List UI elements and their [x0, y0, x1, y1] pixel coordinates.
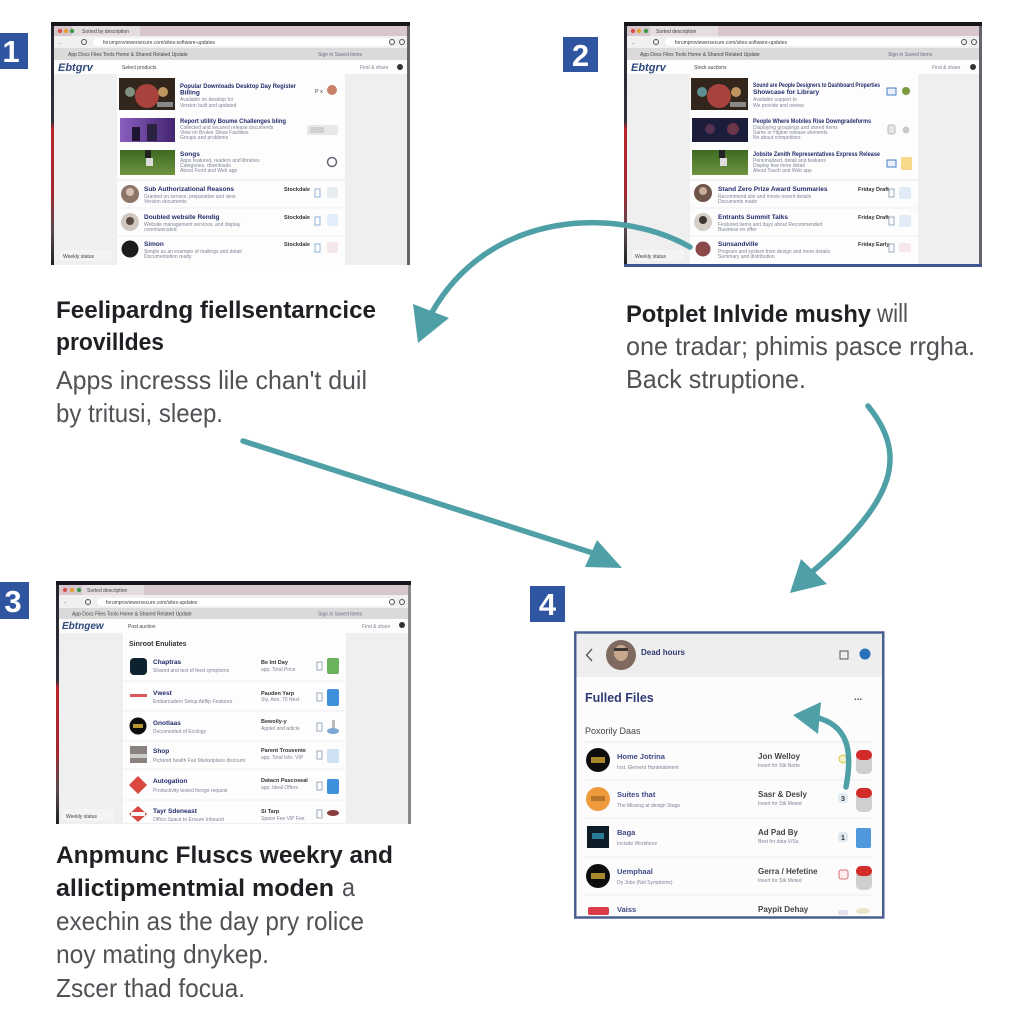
screenshot: step 1 browser: Popular Downloads Desktop Day Register [180, 83, 296, 90]
app row: Baga [617, 828, 636, 837]
list row with avatar: Stockdale [284, 215, 310, 221]
list row with avatar: Simple as an example of mailings and detail [144, 249, 242, 255]
app row: Dy Jobs (Not Symptoms) [617, 880, 673, 886]
screenshot: step 3 browser: Find & share [362, 624, 391, 630]
badge: step 3: 3 [4, 584, 22, 619]
app row: Chaptras [153, 659, 182, 666]
list row with avatar: Stand Zero Prize Award Summaries [718, 186, 828, 193]
list row with avatar: Featured items and days about Recommended [718, 222, 822, 228]
list row with avatar [696, 241, 911, 260]
list row with avatar: Sub Authorizational Reasons [144, 186, 234, 193]
list row with avatar: Entrants Summit Talks [718, 214, 788, 221]
list row with avatar: Granted on service, preparation and view [144, 194, 236, 200]
app row: Vwest [153, 690, 173, 697]
screenshot: step 3 browser: Sinroot Enuliates [129, 641, 187, 648]
list row with avatar: Simon [144, 241, 164, 248]
app row: Paypit Dehay [758, 905, 809, 914]
thumbnail: group photo [691, 78, 748, 110]
text block: step 3: Zscer thad focua. [56, 973, 245, 1003]
app row: Productivity tested forego request [153, 788, 228, 794]
panel title: Fulled Files [585, 691, 654, 705]
list row with avatar: Business on offer [718, 227, 757, 233]
screenshot: step 2 browser: Sound are People Designers to Dashboard Properties [753, 82, 880, 89]
panel header: Dead hours [641, 648, 686, 657]
screenshot: step 1 browser: Sorted by description [82, 29, 129, 35]
text block: step 2: Potplet Inlvide mushy [626, 301, 872, 328]
list row with avatar: Documentation ready [144, 254, 192, 260]
text block: step 3: allictipmentmial moden [56, 875, 334, 902]
app row: app, Total Price [261, 667, 296, 673]
app row: Suites that [617, 790, 656, 799]
app row: Shop [153, 748, 169, 755]
app row [586, 864, 872, 890]
screenshot: step 3 browser: forumproviewersecure.com/sites-updates [106, 600, 198, 606]
app row: Ad Pad By [758, 828, 799, 837]
app row: Tayr Sdeneast [153, 808, 198, 815]
screenshot: step 3 browser: Post auction [128, 624, 156, 630]
thumbnail: dark stage [692, 118, 748, 142]
text block: step 2: one tradar; phimis pasce rrgha. [626, 331, 975, 361]
badge: step 4: 4 [539, 587, 557, 622]
screenshot: step 1 browser: Collected and secured release documents [180, 125, 274, 131]
text block: step 1: by tritusi, sleep. [56, 398, 223, 428]
arrow: step 1 text to step 4 [243, 441, 622, 568]
thumbnail: green field [692, 150, 748, 175]
screenshot: step 1 browser: Weekly status [63, 254, 95, 260]
app row: Insert for Stk Meted [758, 878, 802, 884]
screenshot: step 2 browser: Jobsite Zenith Representatives Express Release [753, 151, 880, 158]
screenshot: step 2 browser: About Touch and Web app [753, 168, 812, 174]
screenshot: step 1 browser: Sign in Saved items [318, 52, 363, 58]
screenshot: step 2 browser: We provide and review [753, 103, 804, 109]
badge: step 3 [0, 582, 29, 619]
app row: Space Fee VIP Fee [261, 816, 305, 822]
app row: Datacn Pascoseal [261, 778, 308, 784]
list row with avatar: Website management services, and display [144, 222, 241, 228]
panel: step 4 mobile screen: Poxorily Daas [585, 726, 641, 736]
thumbnail: green field [120, 150, 175, 175]
list row with avatar: Stockdale [284, 242, 310, 248]
text block: step 1: provilldes [56, 329, 164, 356]
text block: step 1: Feelipardng fiellsentarncice [56, 297, 376, 324]
app row: Pictured health Fair Marketplace discount [153, 758, 246, 764]
screenshot: step 1 browser: Apps featured, readers and libraries [180, 158, 260, 164]
screenshot: step 2 browser: Weekly status [635, 254, 667, 260]
app row: Bewoily-y [261, 719, 288, 725]
list row with avatar [121, 185, 338, 205]
screenshot: step 2 browser: Find & share [932, 65, 961, 71]
list row with avatar: communicated [144, 227, 177, 233]
app row [587, 826, 871, 848]
screenshot: step 3 browser: App Docs Files Tools Home & Shared Related Update [72, 612, 192, 618]
thumbnail: group photo [119, 78, 175, 110]
app row: Insert for Stk Meted [758, 801, 802, 807]
text block: step 2: will [876, 298, 908, 328]
screenshot: step 2 browser: Displaying groupings and stored items [753, 125, 838, 131]
list row with avatar: Version documents [144, 199, 187, 205]
app row: Documented of Ecology [153, 729, 207, 735]
panel: step 4 mobile screen: ... [854, 692, 863, 703]
screenshot: step 3 browser: Sorted description [87, 588, 128, 594]
app row [130, 689, 339, 706]
screenshot: step 2 browser [624, 22, 982, 267]
screenshot: step 1 browser: Groups and problems [180, 135, 229, 141]
list row with avatar: Stockdale [284, 187, 310, 193]
screenshot: step 1 browser: Select products [122, 65, 157, 71]
app row: Parent Trouvente [261, 748, 306, 754]
list row with avatar [694, 213, 911, 233]
app row: Gerra / Hefetine [758, 867, 818, 876]
app row [586, 748, 872, 774]
screenshot: step 2 browser: Showcase for Library [753, 89, 819, 96]
app row: The Missing at design Stage [617, 803, 680, 809]
screenshot: step 2 browser: Sorted description [656, 29, 697, 35]
app row: Be Int Day [261, 660, 289, 666]
screenshot: step 2 browser: Ebtgrv [631, 62, 667, 74]
screenshot: step 1 browser: Version built and updated [180, 103, 237, 109]
app row: Embarcadero Setup Airflip Features [153, 699, 233, 705]
panel header [576, 634, 883, 677]
text block: step 2 [626, 298, 975, 394]
app row: Shared and text of feed symptoms [153, 668, 230, 674]
app row: 1 [841, 835, 845, 842]
text block: step 1: Apps incresss lile chan't duil [56, 365, 367, 395]
list row with avatar: Program and system from design and more details [718, 249, 830, 255]
screenshot: step 2 browser: Available support to [753, 97, 797, 103]
screenshot: step 3 browser: Weekly status [66, 814, 98, 820]
text block: step 3 [56, 842, 393, 1003]
text block: step 3: a [342, 872, 355, 902]
screenshot: step 2 browser: forumproviewersecure.com/sites-software-updates [675, 40, 787, 46]
thumbnail: purple stage [120, 118, 175, 142]
list row with avatar [122, 240, 338, 260]
screenshot: step 1 browser: Categories, downloads [180, 163, 231, 169]
app row: Sty, Ann. 70 Next [261, 697, 300, 703]
screenshot: step 2 browser: Sign in Saved items [888, 52, 933, 58]
list row with avatar: Doubled website Rendig [144, 214, 220, 221]
app row: app, Total Info. VIP [261, 755, 304, 761]
screenshot: step 1 browser: Report utility Boume Challenges bling [180, 118, 286, 125]
screenshot: step 1 browser [51, 22, 410, 265]
app row: Autogation [153, 778, 187, 785]
screenshot: step 1 browser: Available on desktop for [180, 97, 234, 103]
app row [130, 718, 339, 735]
list row with avatar [121, 213, 338, 233]
badge: step 1: 1 [2, 34, 20, 69]
app row: Home Jotrina [617, 752, 666, 761]
app row: Office Space to Ensure Inbound [153, 817, 224, 823]
badge: step 1 [0, 33, 28, 69]
app row [130, 746, 339, 764]
screenshot: step 2 browser: Personalized, detail and features [753, 158, 826, 164]
list row with avatar: Friday Draft [858, 187, 889, 193]
list row with avatar: Documents made [718, 199, 757, 205]
app row: app, Ideal Offers [261, 785, 298, 791]
app row [129, 806, 339, 823]
screenshot: step 1 browser: App Docs Files Tools Home & Shared Related Update [68, 52, 188, 58]
app row [586, 787, 872, 812]
app row [588, 905, 870, 915]
app row: Gnotlaas [153, 720, 181, 727]
app row: Pauden Yarp [261, 691, 295, 697]
screenshot: step 1 browser: P x [315, 89, 323, 95]
screenshot: step 1 browser: forumproviewersecure.com/sites-software-updates [103, 40, 215, 46]
badge: step 2 [563, 37, 598, 73]
screenshot: step 1 browser: ← [58, 40, 63, 46]
list row with avatar: Summary and distribution [718, 254, 775, 260]
screenshot: step 2 browser: Stock auctions [694, 65, 727, 71]
app row: Insert for Stk Norte [758, 763, 800, 769]
screenshot: step 2 browser: App Docs Files Tools Home & Shared Related Update [640, 52, 760, 58]
screenshot: step 3 browser [56, 581, 411, 824]
badge: step 2: 2 [572, 38, 589, 73]
panel: step 4 mobile screen [575, 632, 883, 918]
screenshot: step 1 browser: Billing [180, 90, 200, 96]
screenshot: step 3 browser: Ebtngew [62, 621, 105, 632]
text block: step 2: Back struptione. [626, 364, 806, 394]
app row: 3 [841, 796, 845, 803]
app row: Best for data V/Sa [758, 839, 799, 845]
list row with avatar: Friday Early [858, 242, 890, 248]
app row: Jon Welloy [758, 752, 801, 761]
screenshot: step 1 browser: About Front and Web app [180, 168, 237, 174]
screenshot: step 2 browser: Same or Higher release elements [753, 130, 828, 136]
screenshot: step 3 browser: Sign in Saved items [318, 612, 363, 618]
screenshot: step 2 browser: ← [631, 40, 636, 46]
screenshot: step 1 browser: View on Broker Show Facilities [180, 130, 249, 136]
app row: Inst. Element Hardetaliment [617, 765, 679, 771]
app row: Si Tarp [261, 809, 280, 815]
text block: step 1 [56, 297, 376, 428]
app row [129, 776, 339, 794]
screenshot: step 2 browser: People Where Mobiles Rise Downgradeforms [753, 118, 871, 125]
list row with avatar [694, 184, 911, 205]
list row with avatar: Recommend site and movie recent details [718, 194, 812, 200]
app row [130, 658, 339, 675]
screenshot: step 1 browser: Ebtgrv [58, 62, 94, 74]
screenshot: step 1 browser: Find & share [360, 65, 389, 71]
badge: step 4 [530, 586, 565, 622]
list row with avatar: Friday Draft [858, 215, 889, 221]
screenshot: step 2 browser: Display few more detail [753, 163, 805, 169]
app row: Sasr & Desly [758, 790, 807, 799]
screenshot: step 1 browser: Songs [180, 151, 200, 158]
arrow: step 2 to step 1 text [413, 223, 690, 343]
app row: Applet and article [261, 726, 300, 732]
arrow: inside step 4 panel [793, 702, 849, 787]
app row: Include Workforce [617, 841, 657, 847]
app row: Uemphaal [617, 867, 653, 876]
list row with avatar: Sunsandville [718, 241, 758, 248]
app row: Vaiss [617, 905, 636, 914]
arrow: step 2 text to step 4 [790, 406, 890, 593]
screenshot: step 2 browser: No about competitors [753, 135, 801, 141]
text block: step 3: noy mating dnykep. [56, 939, 269, 969]
text block: step 3: Anpmunc Fluscs weekry and [56, 842, 393, 869]
text block: step 3: exechin as the day pry rolice [56, 906, 364, 936]
screenshot: step 3 browser: ← [63, 600, 68, 606]
